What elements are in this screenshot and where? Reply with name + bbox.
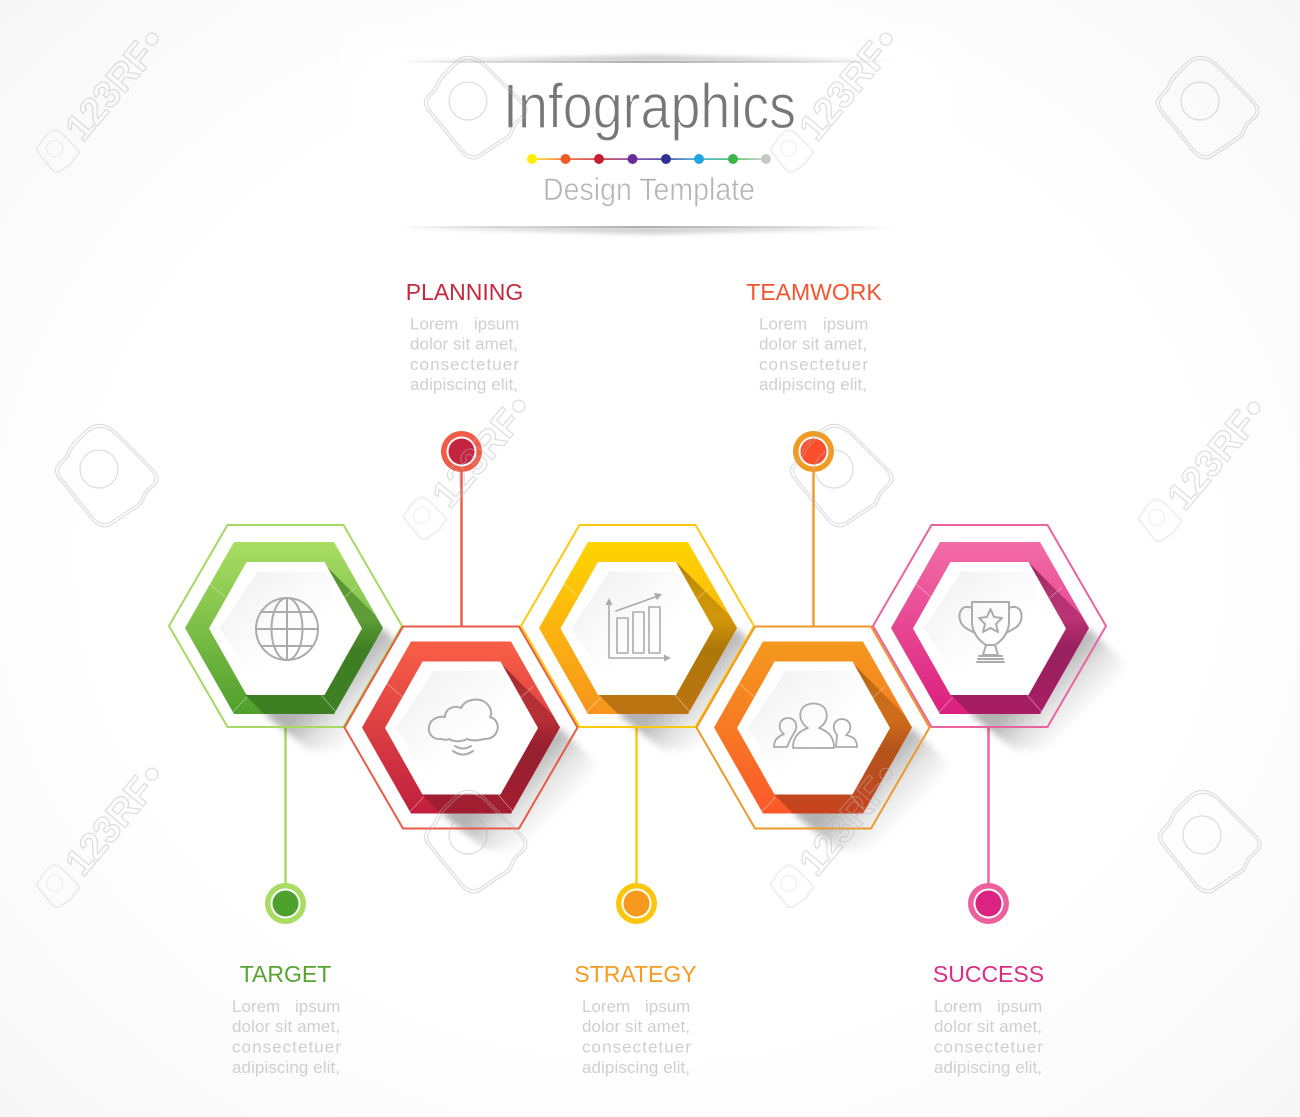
text block: teamwork: dolor sit amet,: [759, 334, 867, 354]
subheading: Design Template: Design Template: [543, 171, 755, 207]
watermarks: 123RF: [58, 35, 163, 149]
text block: success: dolor sit amet,: [934, 1017, 1042, 1036]
text block: target: ipsum: [295, 997, 340, 1016]
connector: target stem: [284, 727, 287, 885]
watermarks: 123RF: [792, 35, 897, 149]
text block: teamwork: adipiscing elit,: [759, 375, 867, 394]
text block: teamwork: Lorem: [759, 314, 807, 334]
hexagon: planning (red): [344, 626, 596, 850]
text block: success: adipiscing elit,: [934, 1058, 1042, 1077]
icon: people: [774, 704, 857, 748]
title panel: [350, 40, 950, 250]
text block: strategy: dolor sit amet,: [582, 1017, 690, 1036]
text block: planning: PLANNING: [406, 279, 523, 305]
watermarks: 123RF: [792, 770, 897, 884]
icon: cloud: [429, 700, 498, 754]
icon: bar chart: [606, 593, 671, 662]
hexagon: teamwork (orange): [696, 626, 948, 850]
colored dot timeline: [527, 154, 771, 164]
hexagon: target (green): [169, 525, 419, 750]
marker: planning: [441, 431, 482, 472]
watermarks: [15, 15, 1281, 929]
marker: strategy: [616, 883, 657, 924]
watermarks: 123RF: [58, 770, 163, 884]
text block: success: SUCCESS: [933, 961, 1044, 987]
hexagon: strategy (yellow): [521, 525, 773, 750]
text block: success: consectetuer: [934, 1038, 1043, 1056]
text block: target: dolor sit amet,: [232, 1017, 340, 1036]
connector: planning stem: [460, 470, 463, 627]
watermarks: 123RF: [1160, 404, 1265, 518]
text block: planning: Lorem: [410, 314, 458, 334]
marker: target: [265, 883, 306, 924]
icon: globe: [256, 598, 318, 660]
text block: teamwork: TEAMWORK: [746, 279, 882, 305]
text block: strategy: [574, 961, 697, 1077]
text block: target: consectetuer: [232, 1038, 341, 1056]
text block: strategy: adipiscing elit,: [582, 1058, 690, 1077]
text block: planning: adipiscing elit,: [410, 375, 518, 394]
heading: Infographics: Infographics: [503, 72, 796, 142]
watermarks: 123RF: [425, 402, 530, 516]
text block: strategy: Lorem: [582, 997, 630, 1016]
text block: planning: [406, 279, 523, 394]
text block: teamwork: consectetuer: [759, 355, 868, 374]
icon: trophy: [960, 602, 1022, 662]
marker: success: [968, 883, 1009, 924]
text block: strategy: STRATEGY: [574, 961, 697, 987]
text block: planning: dolor sit amet,: [410, 334, 518, 354]
text block: target: Lorem: [232, 997, 280, 1016]
connector: strategy stem: [635, 727, 638, 885]
text block: target: adipiscing elit,: [232, 1058, 340, 1077]
connector: teamwork stem: [812, 470, 815, 627]
text block: planning: ipsum: [474, 314, 519, 334]
text block: target: TARGET: [240, 961, 331, 987]
text block: strategy: ipsum: [645, 997, 690, 1016]
connector: success stem: [987, 727, 990, 885]
text block: success: ipsum: [997, 997, 1042, 1016]
text block: success: [933, 961, 1044, 1077]
text block: teamwork: ipsum: [823, 314, 868, 334]
text block: target: [232, 961, 341, 1077]
text block: planning: consectetuer: [410, 355, 519, 374]
text block: strategy: consectetuer: [582, 1038, 691, 1056]
text block: success: Lorem: [934, 997, 982, 1016]
text block: teamwork: [746, 279, 882, 394]
marker: teamwork: [793, 431, 834, 472]
hexagon: success (pink): [873, 525, 1125, 750]
